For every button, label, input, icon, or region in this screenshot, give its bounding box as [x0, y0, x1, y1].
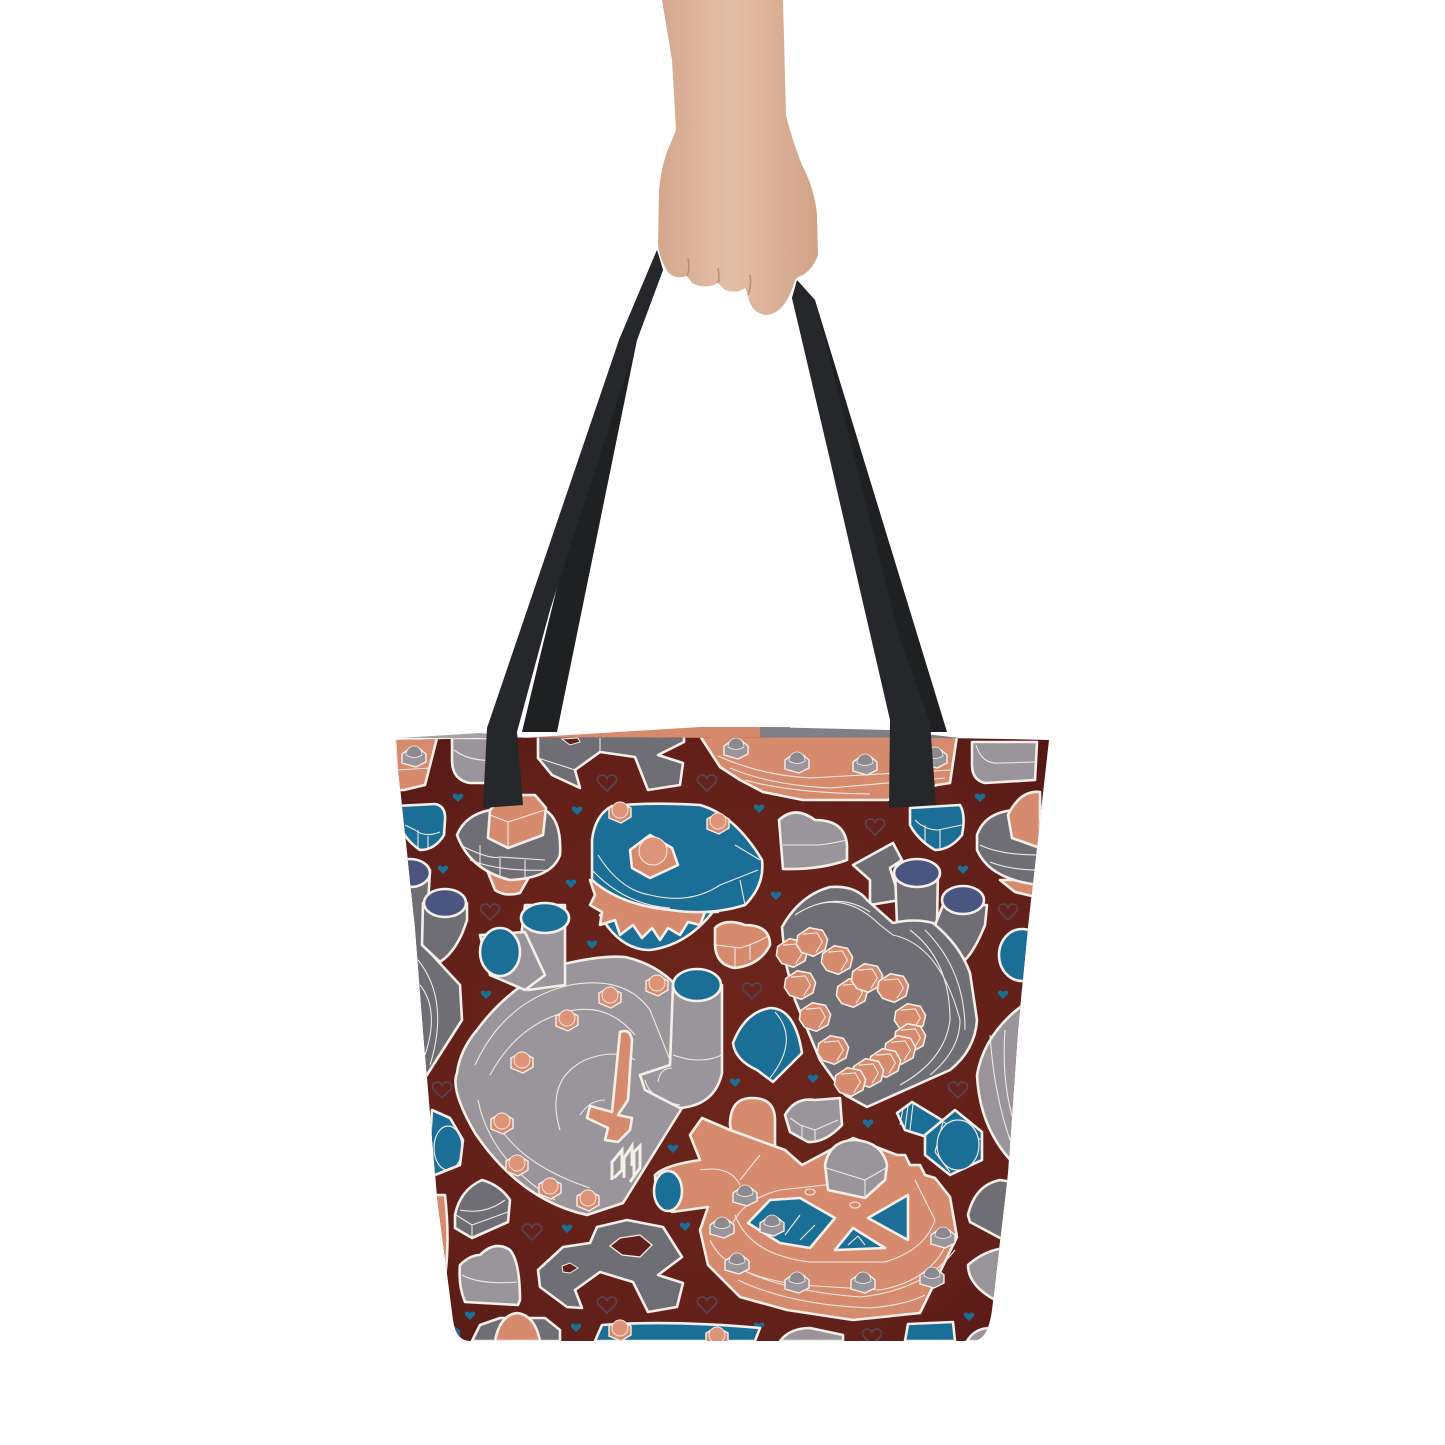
right gear	[977, 792, 1040, 898]
blue heart with gear	[590, 802, 762, 950]
top right cylinder	[972, 742, 1037, 783]
large gray valve heart	[455, 903, 722, 1215]
left orange sliver	[435, 1195, 448, 1277]
left blue heart	[396, 804, 445, 850]
orange valve heart	[654, 1098, 957, 1320]
front strap left	[483, 250, 663, 808]
bag body	[390, 736, 1049, 1348]
small orange heart	[715, 922, 770, 968]
blue cap	[733, 1008, 802, 1082]
left edge pipes and disc	[408, 858, 468, 1078]
lower wrench	[538, 1220, 683, 1312]
gray domed nut	[455, 1180, 510, 1238]
outline hearts	[432, 775, 1018, 1345]
top left pedestal	[395, 738, 437, 790]
tote bag product illustration	[395, 0, 1049, 1341]
tiny blue hearts	[438, 794, 1008, 1332]
big orange heart top	[700, 736, 957, 800]
gray gear	[457, 795, 560, 894]
hand and arm	[658, 0, 818, 315]
top wrench	[538, 736, 684, 790]
white gap between left straps	[517, 606, 552, 732]
top cylinder	[450, 738, 486, 784]
logo mark	[612, 1146, 640, 1182]
blue bolt	[897, 1102, 982, 1175]
center small gray heart	[785, 1098, 842, 1142]
back strap right	[792, 280, 947, 732]
gray heart with orange bolts	[776, 843, 987, 1107]
back interior rim	[400, 727, 960, 738]
lower gray heart	[460, 1246, 520, 1305]
top gray rim pieces	[760, 738, 778, 739]
right edge shapes	[966, 928, 1028, 1300]
small gray heart	[779, 812, 847, 869]
bottom edge pieces	[454, 1312, 988, 1341]
left edge blue nut	[428, 1110, 463, 1175]
front strap right	[792, 283, 936, 808]
small blue heart right	[910, 805, 964, 850]
back strap left	[521, 250, 663, 732]
